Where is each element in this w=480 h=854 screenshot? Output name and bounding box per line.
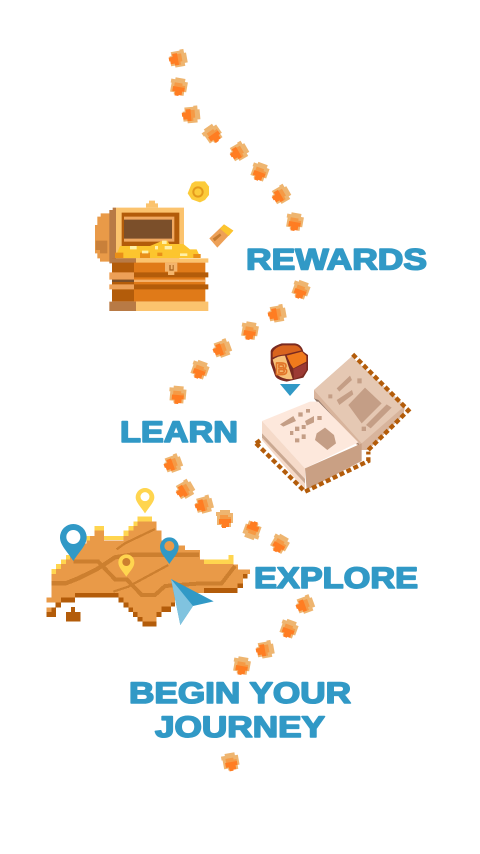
heading: learn: LEARN	[120, 416, 238, 449]
icon: pixel map	[47, 517, 250, 627]
heading: begin your journey	[129, 677, 351, 744]
icon: yellow location pin top	[136, 488, 154, 513]
dotted path: rewards to learn segment	[168, 278, 312, 405]
icon: gold ticket	[209, 224, 233, 248]
heading: rewards: REWARDS	[246, 244, 427, 276]
icon: treasure chest	[95, 201, 208, 311]
heading: explore: EXPLORE	[254, 562, 418, 595]
dotted path: top segment	[168, 49, 304, 232]
dotted path: learn to explore segment	[161, 452, 291, 556]
heading: begin your journey: JOURNEY	[155, 711, 325, 744]
icon: open book	[256, 354, 408, 492]
icon: bread token with letter B: B	[275, 359, 287, 378]
icon: yellow location pin on map	[118, 554, 134, 577]
icon: gold coin	[188, 181, 209, 202]
heading: begin your journey: BEGIN YOUR	[129, 677, 351, 710]
icon: pixel arrow cursor	[171, 579, 214, 625]
icon: large blue location pin	[60, 524, 87, 561]
dotted path: explore to journey segment	[221, 593, 316, 772]
icon: bread token with letter B	[271, 343, 308, 382]
icon: blue marker triangle	[280, 384, 300, 396]
icon: blue location pin on map	[160, 537, 179, 564]
